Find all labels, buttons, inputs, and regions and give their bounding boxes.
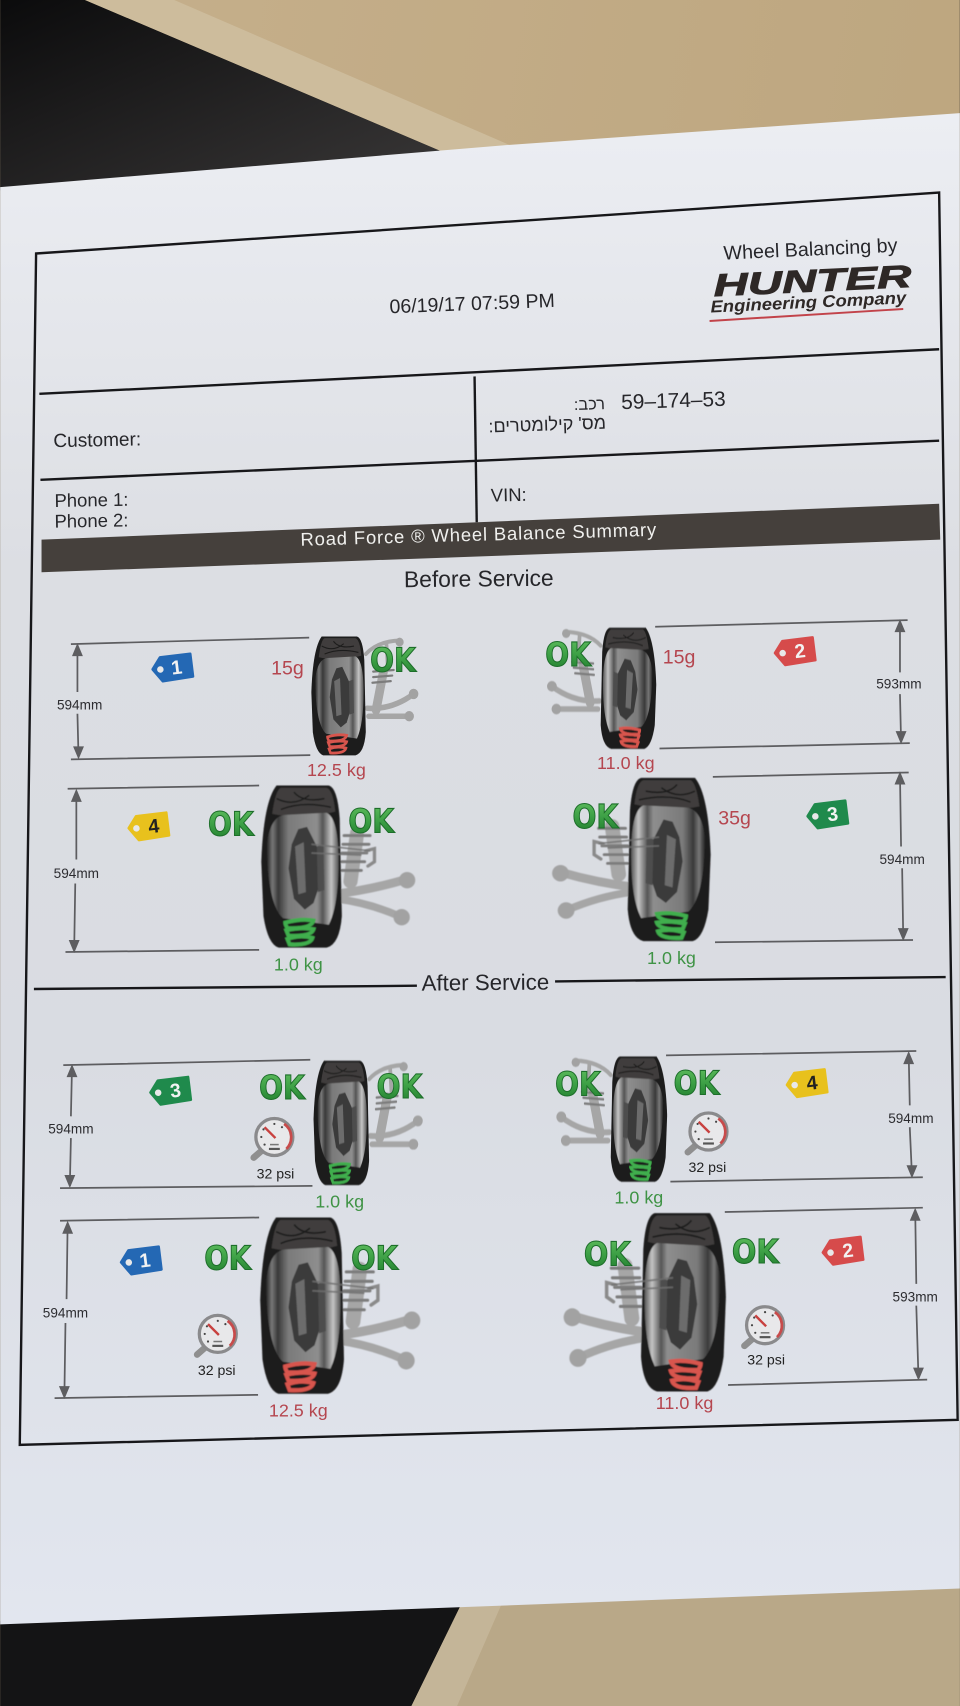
tag 3 xyxy=(149,1077,191,1106)
summary title bar xyxy=(42,504,940,572)
dimension: 594mm xyxy=(48,1122,94,1137)
logo: Hunter Engineering: HUNTER xyxy=(713,258,912,303)
dimension xyxy=(43,1217,259,1399)
pressure: 32 psi xyxy=(257,1165,294,1181)
spring load: 11.0 kg xyxy=(597,753,655,773)
wheel xyxy=(314,1061,423,1185)
weight label: 15g xyxy=(663,647,695,669)
OK badge left: OK xyxy=(555,1066,602,1104)
vehicle plate field: 59–174–53 xyxy=(621,388,726,414)
panel: before wheel 4 xyxy=(54,786,415,975)
dimension xyxy=(54,786,259,953)
dimension xyxy=(713,771,925,942)
tag 2 xyxy=(822,1237,863,1265)
wheel xyxy=(260,1217,420,1394)
form frame and rules xyxy=(20,193,958,1445)
dimension: 594mm xyxy=(879,852,925,867)
dimension: 594mm xyxy=(888,1111,934,1126)
tag 2 xyxy=(774,637,815,666)
spring load: 12.5 kg xyxy=(269,1401,328,1421)
panel: after wheel 2 xyxy=(564,1208,938,1413)
dimension: 594mm xyxy=(57,697,102,712)
spring load: 1.0 kg xyxy=(614,1187,663,1207)
phone fields: Phone 1: xyxy=(54,489,129,511)
tag 4 xyxy=(786,1069,827,1098)
dimension xyxy=(666,1051,934,1182)
tag 1: 1 xyxy=(170,656,183,680)
OK badge right: OK xyxy=(351,1240,399,1278)
pressure: 32 psi xyxy=(198,1362,236,1378)
pressure: 32 psi xyxy=(689,1159,726,1175)
logo: Hunter Engineering: Engineering Company xyxy=(710,288,908,317)
spring load: 11.0 kg xyxy=(656,1393,713,1413)
dimension: 594mm xyxy=(54,866,99,881)
logo: Hunter Engineering xyxy=(710,235,912,321)
header date and time: 06/19/17 07:59 PM xyxy=(389,290,555,318)
OK badge: OK xyxy=(370,641,417,679)
gauge xyxy=(254,1118,293,1158)
OK badge right: OK xyxy=(674,1065,721,1103)
wheel xyxy=(556,1056,667,1182)
spring load: 1.0 kg xyxy=(274,955,323,975)
tag 2: 2 xyxy=(841,1239,855,1263)
tag 1 xyxy=(120,1247,162,1275)
customer field: Customer: xyxy=(53,429,141,452)
panel: after wheel 3 xyxy=(48,1060,424,1212)
wheel xyxy=(311,636,418,755)
panel: before wheel 1 xyxy=(57,636,418,780)
dimension xyxy=(57,638,310,759)
wheel xyxy=(552,778,711,941)
tag 2: 2 xyxy=(793,640,807,663)
OK badge right: OK xyxy=(348,802,396,840)
wheel xyxy=(547,628,656,749)
vehicle plate field xyxy=(574,388,726,414)
OK badge right: OK xyxy=(732,1233,780,1271)
tag 3: 3 xyxy=(169,1080,182,1103)
OK badge: OK xyxy=(572,798,620,836)
summary title bar: Road Force ® Wheel Balance Summary xyxy=(300,519,657,550)
OK badge left: OK xyxy=(208,806,255,844)
tag 1 xyxy=(151,654,193,682)
dimension: 593mm xyxy=(893,1289,938,1304)
OK badge right: OK xyxy=(377,1068,424,1106)
panel: before wheel 3 xyxy=(552,771,925,968)
dimension: 594mm xyxy=(43,1306,88,1321)
panel: after wheel 4 xyxy=(555,1051,934,1207)
weight label: 15g xyxy=(271,658,304,680)
phone fields xyxy=(54,489,129,532)
phone fields: Phone 2: xyxy=(54,509,129,532)
gauge xyxy=(744,1307,784,1346)
wheel xyxy=(261,786,415,948)
tag 1: 1 xyxy=(138,1249,152,1273)
odometer field: מס' קילומטרים: xyxy=(488,413,606,436)
vehicle plate field: רכב: xyxy=(574,395,605,414)
spring load: 1.0 kg xyxy=(315,1192,364,1212)
gauge xyxy=(688,1113,727,1152)
tag 3 xyxy=(806,801,848,829)
gauge xyxy=(197,1315,236,1355)
panel: before wheel 2 xyxy=(545,619,922,773)
tag 4: 4 xyxy=(805,1072,819,1095)
OK badge left: OK xyxy=(584,1235,632,1273)
dimension xyxy=(655,619,922,749)
weight label: 35g xyxy=(718,808,751,830)
tag 3: 3 xyxy=(826,803,840,826)
tag 4 xyxy=(127,813,169,841)
dimension xyxy=(725,1208,938,1385)
spring load: 12.5 kg xyxy=(307,760,366,780)
dimension xyxy=(48,1060,312,1188)
logo: Hunter Engineering: Wheel Balancing by xyxy=(723,235,898,265)
OK badge left: OK xyxy=(259,1069,306,1107)
spring load: 1.0 kg xyxy=(647,948,696,968)
pressure: 32 psi xyxy=(747,1351,785,1367)
OK badge left: OK xyxy=(204,1240,252,1278)
panel: after wheel 1 xyxy=(43,1217,420,1421)
OK badge: OK xyxy=(545,636,592,674)
VIN field: VIN: xyxy=(491,484,527,506)
dimension: 593mm xyxy=(876,677,922,692)
tag 4: 4 xyxy=(147,815,161,838)
wheel xyxy=(564,1213,726,1391)
heading: before service: Before Service xyxy=(404,565,554,592)
heading: after service: After Service xyxy=(421,970,549,996)
